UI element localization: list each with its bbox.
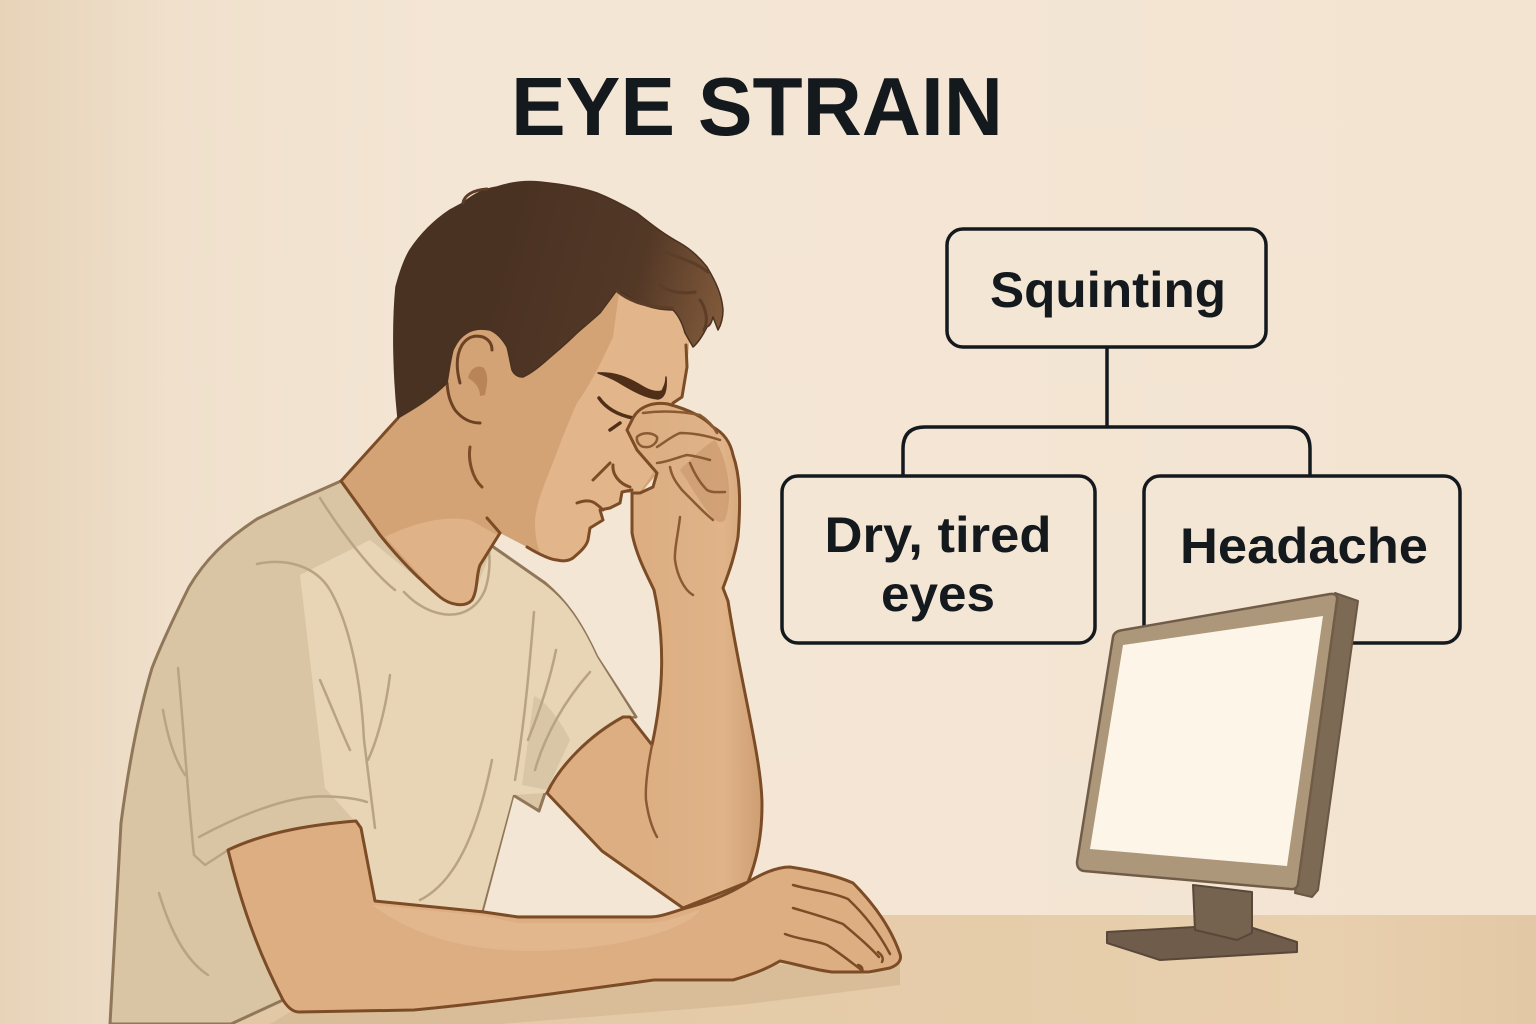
face light area [535,285,690,561]
hair [394,182,723,418]
box: dry, tired eyes: eyes [881,566,995,622]
box: squinting [947,229,1266,347]
box: squinting: Squinting [990,262,1226,318]
person [110,182,901,1024]
nose and mouth lines [577,463,630,510]
monitor stand [1107,885,1297,960]
neck light area [385,519,497,605]
monitor [1077,593,1358,960]
table shadow under arm [270,960,900,1024]
ear [447,336,492,423]
shirt [110,481,636,1024]
armpit shade [522,696,570,790]
box: headache: Headache [1180,518,1428,574]
jaw and face outline [341,345,687,605]
hand shadow [680,440,729,522]
raised arm and hand [547,403,762,908]
connector lines [903,347,1310,476]
title: EYE STRAIN [511,60,1003,153]
symptom tree [782,229,1460,643]
hair tuft and strands [463,189,708,330]
box: dry, tired eyes: Dry, tired [824,507,1052,563]
table [200,915,1536,1024]
flat arm highlight [372,905,700,951]
closed eye [599,398,633,430]
box: headache [1144,476,1460,643]
flat hand finger lines [785,885,890,972]
monitor screen [1090,616,1323,866]
shirt folds and seams [159,498,590,975]
box: dry, tired eyes [782,476,1095,643]
hand finger lines [637,412,725,837]
monitor side [1295,593,1358,897]
monitor frame [1077,594,1337,889]
flat arm and hand [228,821,901,1012]
neck and face [341,280,690,605]
eyebrow [598,373,666,399]
shirt chest light area [300,540,634,910]
